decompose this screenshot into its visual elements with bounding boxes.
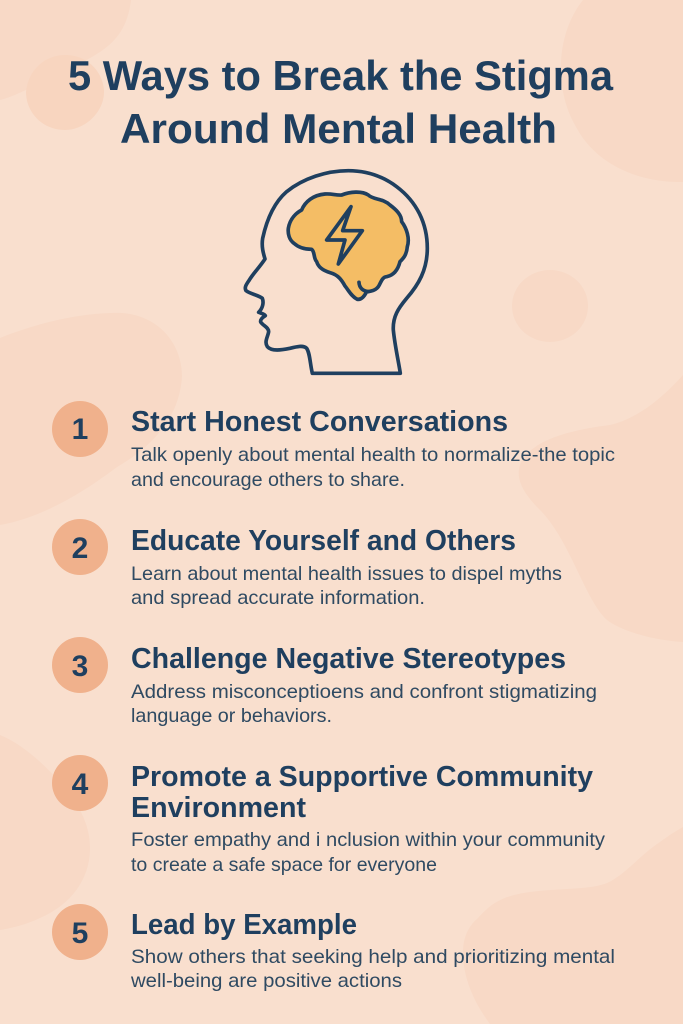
item 1: start honest conversations: [52, 401, 615, 491]
item 1: start honest conversations: Start Honest Conversations: [131, 406, 508, 438]
lightning bolt: [327, 207, 362, 264]
item 2: educate yourself and others: Educate Yourself and Others: [131, 525, 516, 557]
item 3: challenge negative stereotypes: 3: [72, 650, 88, 683]
item 4: promote a supportive community environment: 4: [72, 768, 89, 801]
item 5: lead by example: 5: [72, 917, 88, 950]
title: [68, 52, 614, 152]
item 5: lead by example: well-being are positive actions: [130, 970, 402, 992]
item 4: promote a supportive community environment: Promote a Supportive Community: [131, 761, 593, 793]
item 3: challenge negative stereotypes: Challenge Negative Stereotypes: [131, 643, 566, 675]
item 1: start honest conversations: Talk openly about mental health to normalize-the topic: [131, 444, 615, 466]
item 5: lead by example: [52, 904, 615, 992]
item 2: educate yourself and others: and spread accurate information.: [131, 587, 425, 609]
item 1: start honest conversations: and encourage others to share.: [131, 469, 405, 491]
item 4: promote a supportive community environment: Environment: [131, 792, 306, 824]
item 3: challenge negative stereotypes: [52, 637, 597, 727]
item 5: lead by example: Show others that seeking help and prioritizing mental: [131, 946, 615, 968]
item 5: lead by example: Lead by Example: [131, 909, 357, 941]
brain: [288, 192, 408, 299]
item 4: promote a supportive community environment: [52, 755, 605, 876]
title: 5 Ways to Break the Stigma: [68, 52, 614, 99]
item 2: educate yourself and others: [52, 519, 562, 609]
item 2: educate yourself and others: Learn about mental health issues to dispel myths: [131, 563, 562, 585]
item 4: promote a supportive community environment: to create a safe space for everyone: [131, 854, 437, 876]
item 2: educate yourself and others: 2: [72, 532, 88, 565]
item 3: challenge negative stereotypes: language or behaviors.: [131, 705, 332, 727]
icon: head with brain and lightning bolt: [245, 171, 427, 373]
item 1: start honest conversations: 1: [72, 413, 88, 446]
item 3: challenge negative stereotypes: Address misconceptioens and confront stigmatizing: [131, 681, 597, 703]
item 4: promote a supportive community environment: Foster empathy and i nclusion within your community: [131, 829, 605, 851]
title: Around Mental Health: [120, 105, 557, 152]
